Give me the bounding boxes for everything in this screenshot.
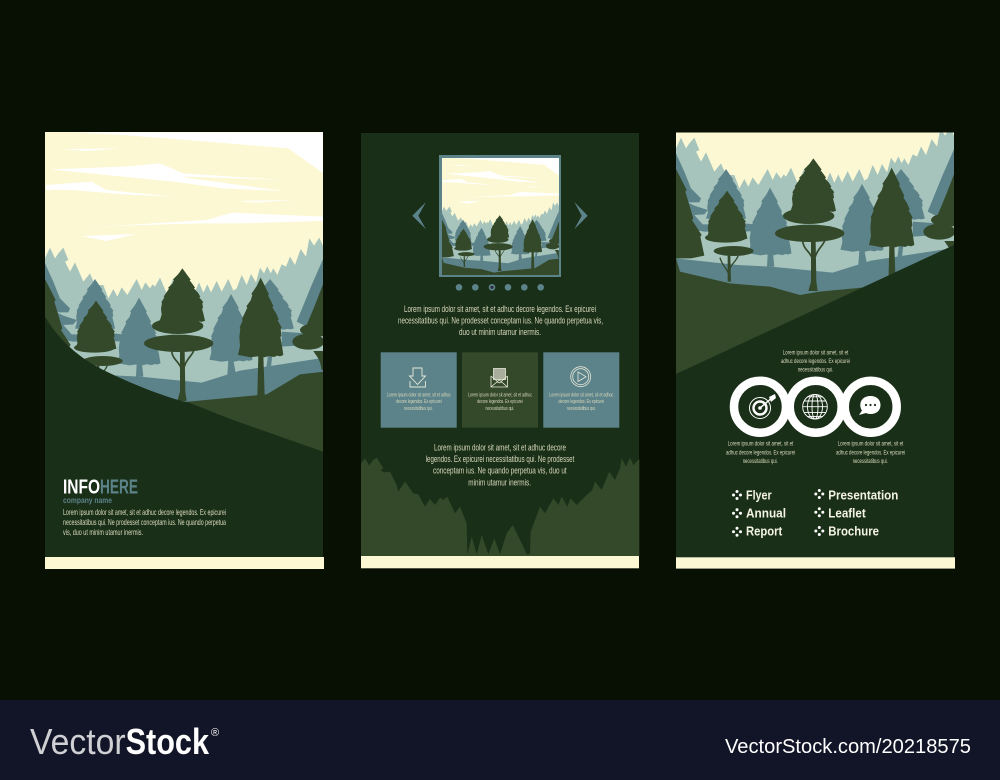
top text: necessitatibus qui. <box>798 366 833 374</box>
card: download <box>381 352 457 428</box>
card text: necessitatibus qui. <box>567 406 596 412</box>
right caption <box>836 440 905 465</box>
lower text <box>426 442 575 488</box>
footer bar <box>0 700 1000 780</box>
icon: play <box>571 367 591 387</box>
body text: Lorem ipsum dolor sit amet, sit et adhuc decore legendos. Ex epicurei <box>63 508 226 517</box>
top text: Lorem ipsum dolor sit amet, sit et <box>783 350 848 356</box>
arrow: previous <box>412 202 426 229</box>
intro text: Lorem ipsum dolor sit amet, sit et adhuc decore legendos. Ex epicurei <box>404 304 596 315</box>
left caption <box>726 440 795 465</box>
body text: necessitatibus qui. Ne prodesset conceptam ius. Ne quando perpetua <box>63 518 226 527</box>
bullet list: Flyer <box>746 487 772 502</box>
left caption: adhuc decore legendos. Ex epicurei <box>726 450 795 456</box>
icon: target <box>750 394 776 418</box>
panel background <box>676 132 954 558</box>
cream footer band <box>676 557 955 569</box>
top text: adhuc decore legendos. Ex epicurei <box>781 358 850 365</box>
card text: necessitatibus qui. <box>486 406 514 412</box>
icon: globe <box>803 394 827 419</box>
panel: brochure cover <box>40 125 333 569</box>
icon: speech bubble <box>859 396 880 415</box>
left caption: necessitatibus qui. <box>743 458 778 465</box>
top text <box>781 350 850 374</box>
bullet list <box>732 487 898 539</box>
lower text: conceptam ius. Ne quando perpetua vis, duo ut <box>433 466 567 477</box>
bullet list: Report <box>746 524 783 539</box>
card: play <box>543 352 619 428</box>
body text: vis, duo ut minim utamur inermis. <box>63 528 143 537</box>
intro text: duo ut minim utamur inermis. <box>459 327 541 338</box>
icon: download <box>410 368 426 387</box>
icon: envelope <box>491 368 508 387</box>
card text: Lorem ipsum dolor sit amet, sit et adhuc <box>387 392 451 398</box>
lower text: Lorem ipsum dolor sit amet, sit et adhuc decore <box>434 442 566 453</box>
linked rings <box>734 381 897 433</box>
title: info here <box>63 476 138 498</box>
forest landscape illustration <box>676 132 954 374</box>
panel background <box>45 132 323 557</box>
title: info here: INFO <box>63 476 100 498</box>
arrow: next <box>574 202 588 229</box>
card text: decore legendos. Ex epicurei <box>477 399 523 405</box>
title: info here: HERE <box>100 476 138 498</box>
left caption: Lorem ipsum dolor sit amet, sit et <box>728 440 793 448</box>
right caption: adhuc decore legendos. Ex epicurei <box>836 450 905 456</box>
bullet list: Annual <box>746 505 786 520</box>
card: mail <box>462 352 538 428</box>
logo: VectorStock: VectorStock <box>30 721 210 762</box>
subtitle: company name: company name <box>63 495 112 505</box>
image frame with forest thumbnail <box>439 155 561 277</box>
card text <box>387 392 451 412</box>
lower text: minim utamur inermis. <box>468 477 531 488</box>
logo registered mark: ® <box>211 727 219 739</box>
right caption: Lorem ipsum dolor sit amet, sit et <box>838 440 903 448</box>
intro text <box>398 304 603 338</box>
intro text: necessitatibus qui. Ne prodesset conceptam ius. Ne quando perpetua vis, <box>398 316 603 326</box>
bullet list: Brochure <box>828 524 879 539</box>
bullet list: Leaflet <box>828 505 866 520</box>
card text: Lorem ipsum dolor sit amet, sit et adhuc <box>468 392 532 398</box>
forest landscape illustration <box>45 132 323 452</box>
carousel dots <box>456 284 544 291</box>
body text <box>63 508 226 537</box>
panel: back page <box>676 132 955 569</box>
panel background <box>361 133 639 556</box>
lower text: legendos. Ex epicurei necessitatibus qui. Ne prodesset <box>426 454 575 465</box>
card text: decore legendos. Ex epicurei <box>558 399 604 405</box>
card text: Lorem ipsum dolor sit amet, sit et adhuc <box>549 392 614 398</box>
card text <box>468 392 532 412</box>
cream footer band <box>361 556 639 568</box>
cream footer band <box>45 557 324 569</box>
bullet list: Presentation <box>828 487 898 502</box>
card text <box>549 392 614 412</box>
bottom forest silhouette <box>361 458 639 556</box>
right caption: necessitatibus qui. <box>853 458 888 465</box>
image id: VectorStock.com/20218575 <box>725 736 971 758</box>
panel: inside page <box>361 133 639 568</box>
card text: decore legendos. Ex epicurei <box>396 399 442 405</box>
card text: necessitatibus qui. <box>404 406 433 412</box>
